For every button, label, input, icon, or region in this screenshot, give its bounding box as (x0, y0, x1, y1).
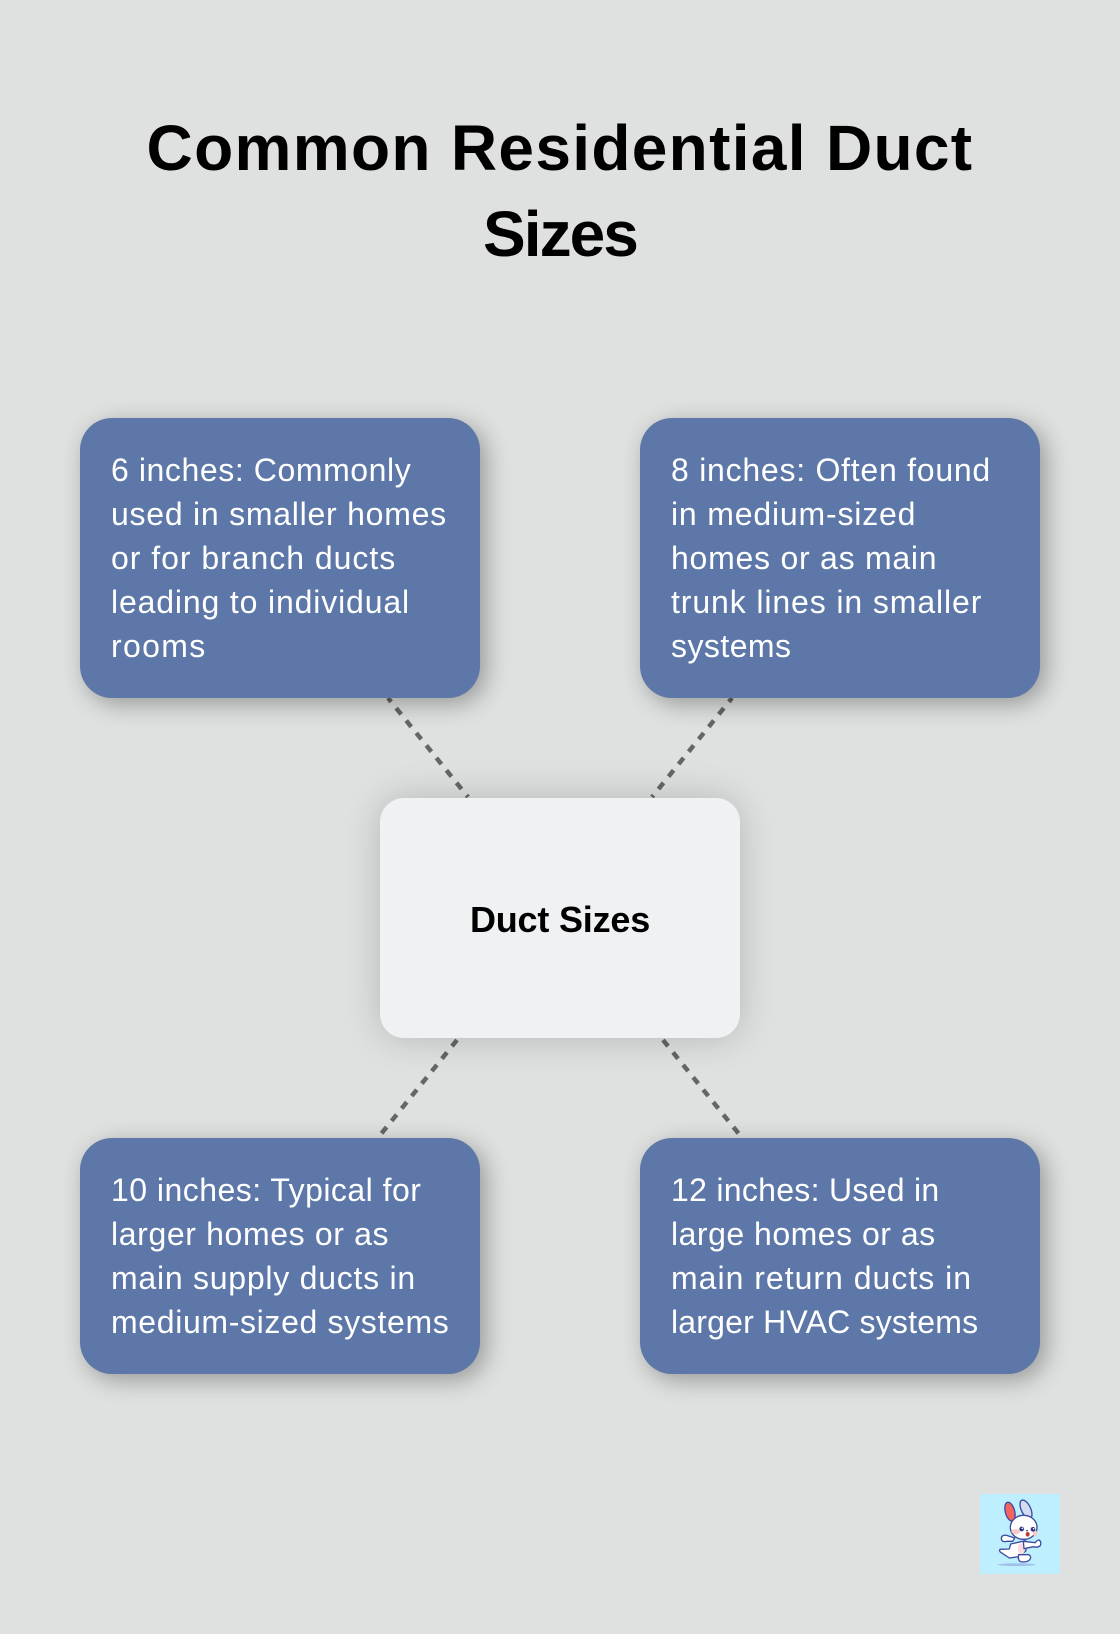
panel: 10 inches (80, 1138, 480, 1374)
panel: 8 inches: homes or as main (671, 540, 937, 576)
panel: 10 inches: medium-sized systems (111, 1304, 449, 1340)
title: Common Residential Duct (147, 112, 973, 184)
icon: running rabbit logo (980, 1494, 1060, 1574)
panel: 6 inches (80, 418, 480, 698)
title: Sizes (483, 198, 637, 270)
title (147, 112, 973, 270)
panel: 10 inches: 10 inches: Typical for (111, 1172, 421, 1208)
panel: 12 inches (640, 1138, 1040, 1374)
panel: 8 inches: 8 inches: Often found (671, 452, 991, 488)
panel: 12 inches: 12 inches: Used in (671, 1172, 940, 1208)
panel: 12 inches: large homes or as (671, 1216, 936, 1252)
panel: 6 inches: rooms (111, 628, 207, 664)
panel: 8 inches: in medium-sized (671, 496, 916, 532)
panel: 10 inches: larger homes or as (111, 1216, 389, 1252)
panel: 12 inches: main return ducts in (671, 1260, 972, 1296)
panel: 6 inches: leading to individual (111, 584, 410, 620)
panel: 8 inches (640, 418, 1040, 698)
panel: 6 inches: used in smaller homes (111, 496, 447, 532)
panel: center label: Duct Sizes (470, 898, 650, 940)
panel: 6 inches: 6 inches: Commonly (111, 452, 411, 488)
panel: center label (380, 798, 740, 1038)
panel: 12 inches: larger HVAC systems (671, 1304, 978, 1340)
panel: 8 inches: systems (671, 628, 792, 664)
panel: 6 inches: or for branch ducts (111, 540, 396, 576)
panel: 8 inches: trunk lines in smaller (671, 584, 982, 620)
panel: 10 inches: main supply ducts in (111, 1260, 416, 1296)
